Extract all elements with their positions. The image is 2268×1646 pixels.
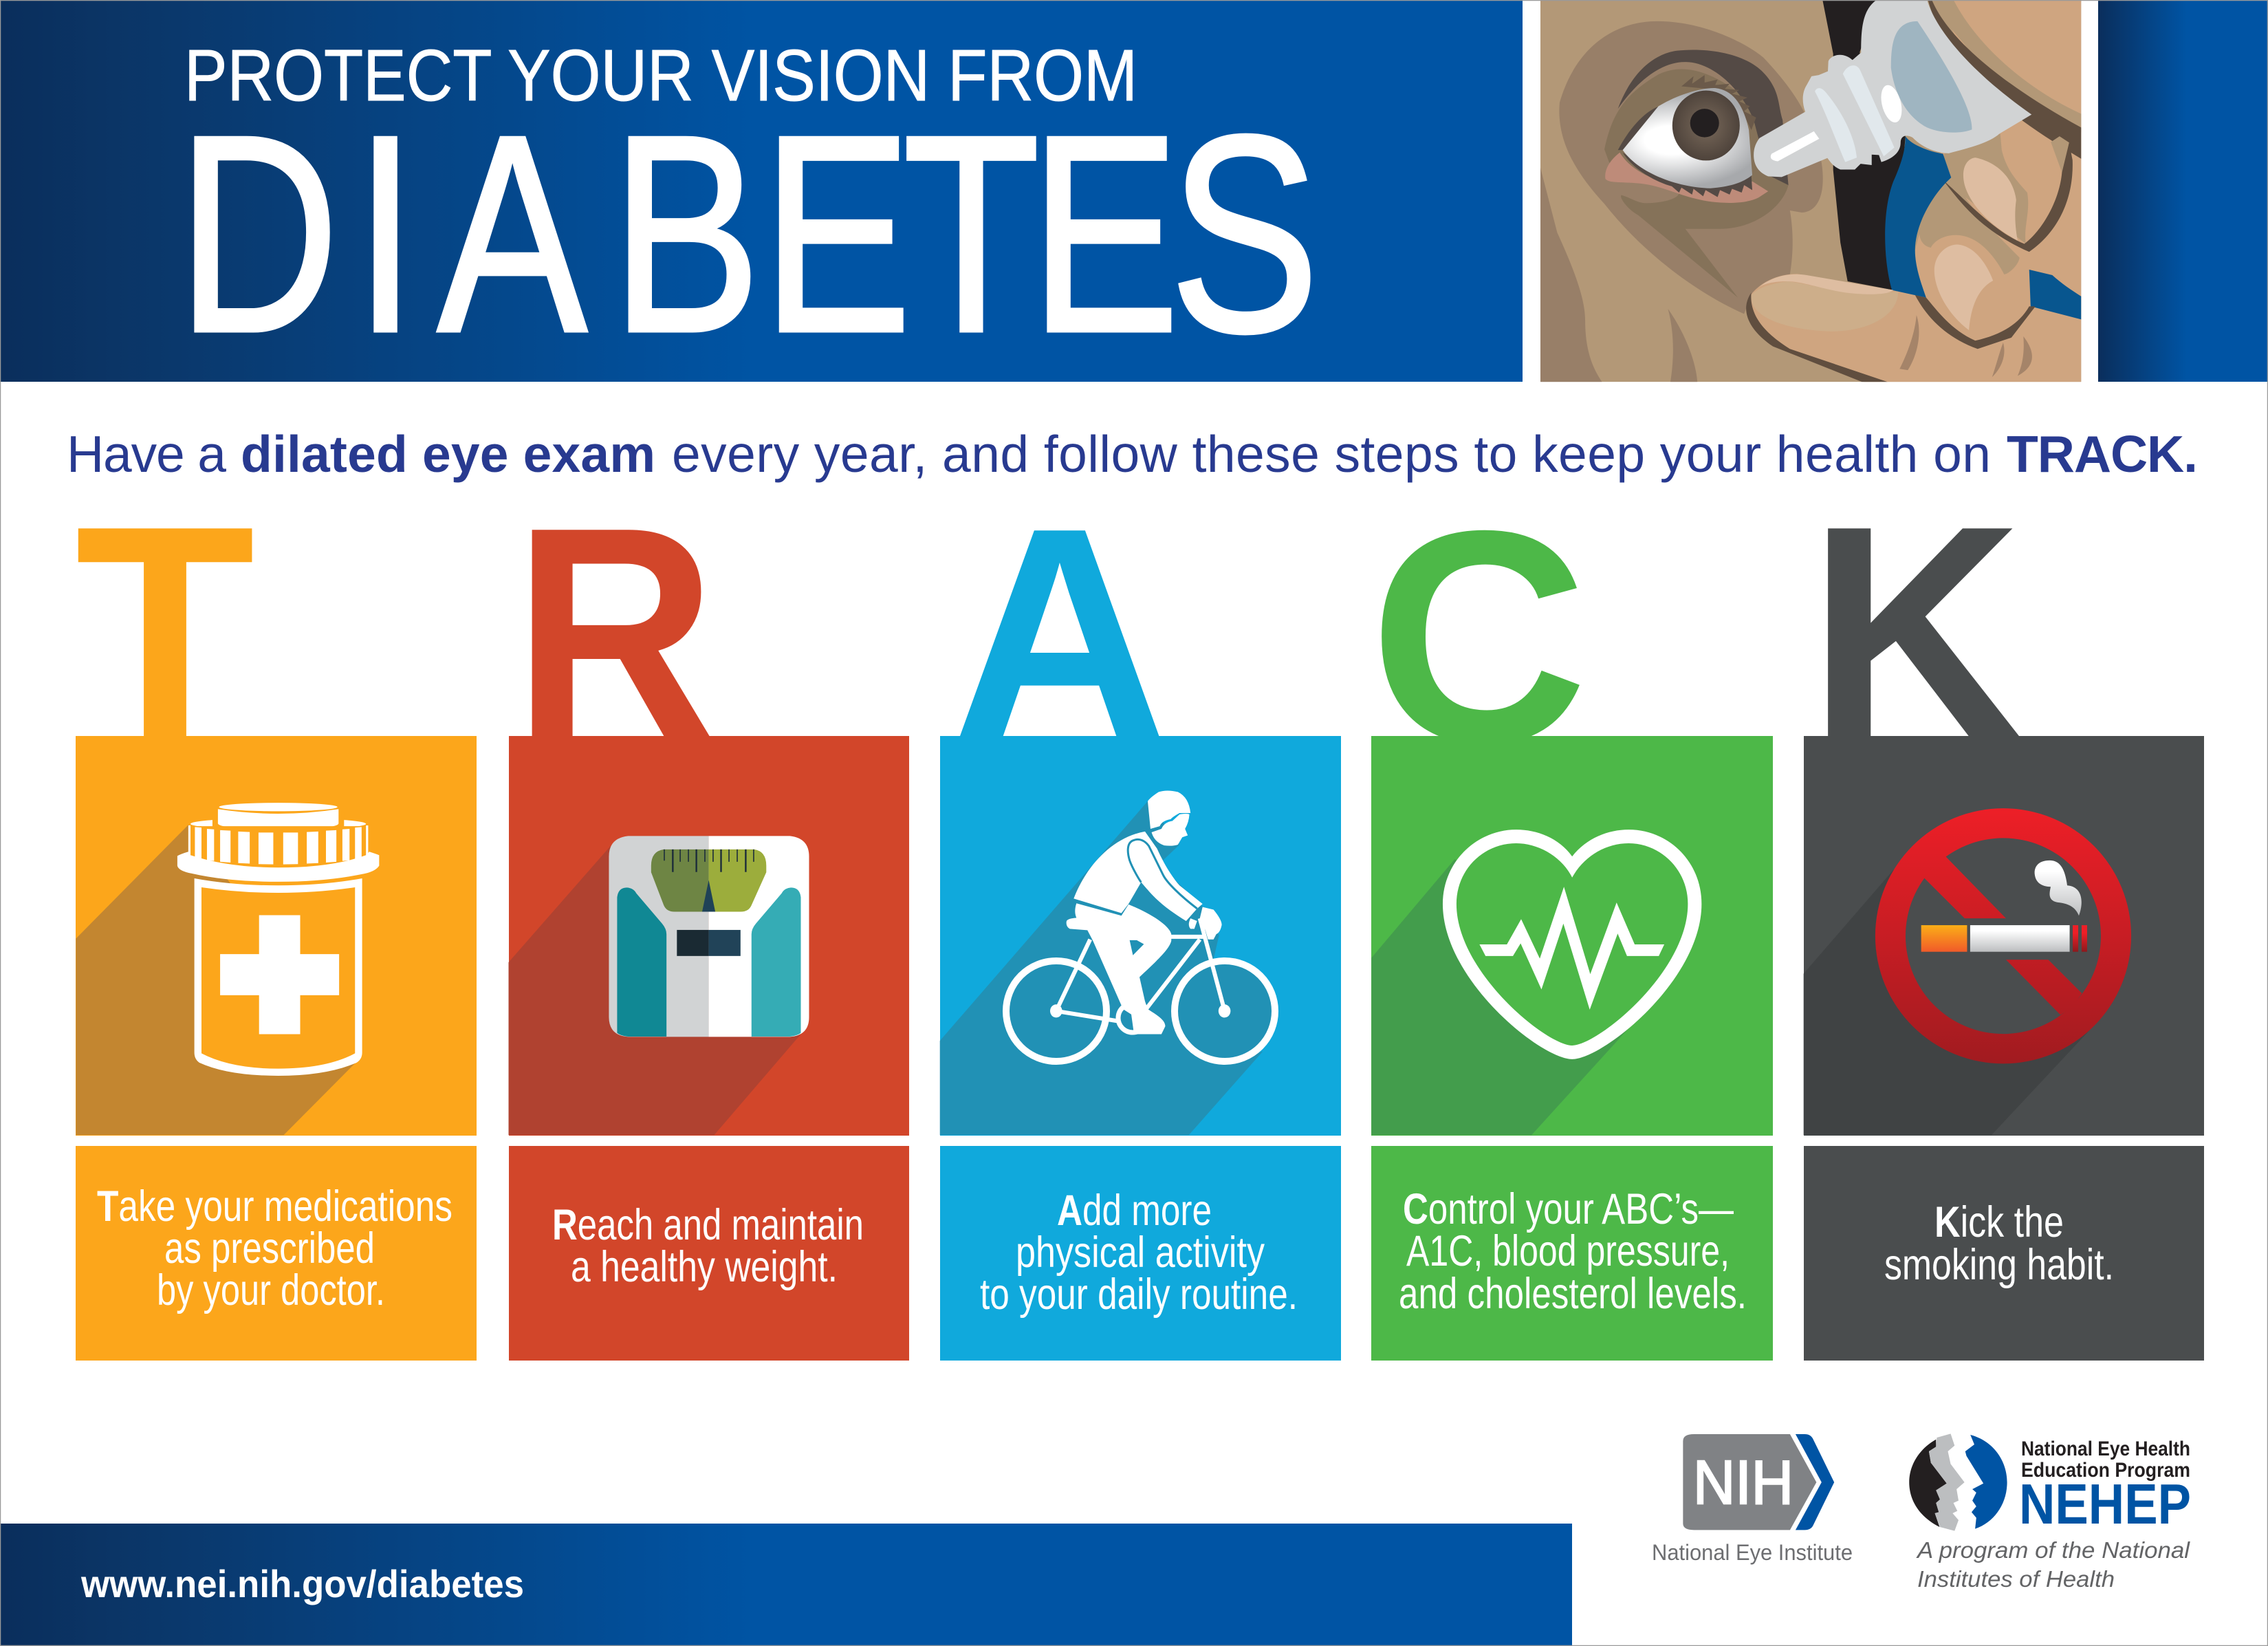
caption: take your medications: Take your medications <box>97 1182 452 1231</box>
panel: C control <box>1371 736 1773 1136</box>
caption: take your medications: as prescribed <box>164 1224 375 1273</box>
caption: control your ABCs: Control your ABC’s— <box>1403 1185 1734 1233</box>
NIH wordmark: NIH <box>1693 1449 1793 1517</box>
panel background <box>1804 736 2204 1136</box>
caption: kick the smoking habit: Kick the <box>1934 1198 2064 1246</box>
letter C: C <box>1369 468 1588 806</box>
panel: R weight <box>509 736 909 1136</box>
panel background <box>509 736 909 1136</box>
caption: add more activity: to your daily routine. <box>980 1270 1298 1319</box>
NIH badge <box>1683 1434 1834 1530</box>
icon: heart with pulse <box>1371 830 1701 1135</box>
caption: kick the smoking habit <box>1804 1146 2204 1361</box>
tagline line 1: A program of the National <box>1916 1537 2191 1563</box>
letter K: K <box>1808 464 2022 801</box>
program name line 2: Education Program <box>2021 1459 2190 1482</box>
program name line 1: National Eye Health <box>2021 1438 2190 1460</box>
icon: bathroom scale <box>509 836 809 1135</box>
panel: T medication <box>76 736 477 1136</box>
letter R: R <box>513 464 717 803</box>
panel background <box>1371 736 1773 1136</box>
caption: add more activity: Add more <box>1057 1187 1212 1235</box>
intro sentence: TRACK. <box>2007 425 2198 483</box>
header blue band <box>0 0 1523 382</box>
logo: NEHEP <box>1909 1433 2191 1592</box>
panel: A activity <box>940 736 1341 1136</box>
letter A: A <box>952 465 1168 803</box>
caption: take your medications <box>76 1146 477 1361</box>
icon: pill bottle <box>76 803 379 1135</box>
title line: protect your vision from: PROTECT YOUR VISION FROM <box>184 35 1137 116</box>
panel: K kick <box>1804 736 2204 1136</box>
caption: control your ABCs <box>1371 1146 1773 1361</box>
caption: add more activity <box>940 1146 1341 1361</box>
header right blue stripe <box>2098 0 2268 382</box>
letter T: T <box>75 464 255 801</box>
caption: reach and maintain: Reach and maintain <box>552 1201 864 1249</box>
intro sentence: Have a <box>67 425 226 483</box>
footer band with URL <box>0 1524 1572 1646</box>
header banner <box>0 0 2268 391</box>
caption: control your ABCs: A1C, blood pressure, <box>1406 1227 1730 1275</box>
NEHEP wordmark: NEHEP <box>2019 1472 2191 1536</box>
logo: NIH National Eye Institute <box>1652 1434 1853 1565</box>
caption: reach and maintain <box>509 1146 909 1361</box>
institute name: National Eye Institute <box>1652 1540 1853 1565</box>
wheels <box>1006 961 1275 1061</box>
panel background <box>76 736 477 1136</box>
caption: control your ABCs: and cholesterol levels. <box>1399 1270 1747 1318</box>
caption: kick the smoking habit: smoking habit. <box>1884 1241 2114 1289</box>
tagline line 2: Institutes of Health <box>1917 1566 2115 1592</box>
footer band with URL: www.nei.nih.gov/diabetes <box>80 1562 524 1605</box>
icon: no smoking sign <box>1804 808 2131 1135</box>
panel background <box>940 736 1341 1136</box>
caption: add more activity: physical activity <box>1016 1228 1265 1277</box>
long shadow <box>940 801 1278 1135</box>
caption: take your medications: by your doctor. <box>157 1266 385 1314</box>
rider and frame <box>1050 791 1230 1034</box>
icon: cyclist <box>940 791 1278 1135</box>
title word: diabetes: DIABETES <box>177 78 1320 391</box>
photo illustration: eye drops <box>1540 0 2081 382</box>
intro sentence: dilated eye exam <box>241 425 655 483</box>
intro sentence: every year, and follow these steps to keep your health on <box>672 425 1991 483</box>
three faces emblem <box>1909 1433 2007 1531</box>
caption: reach and maintain: a healthy weight. <box>571 1243 838 1291</box>
